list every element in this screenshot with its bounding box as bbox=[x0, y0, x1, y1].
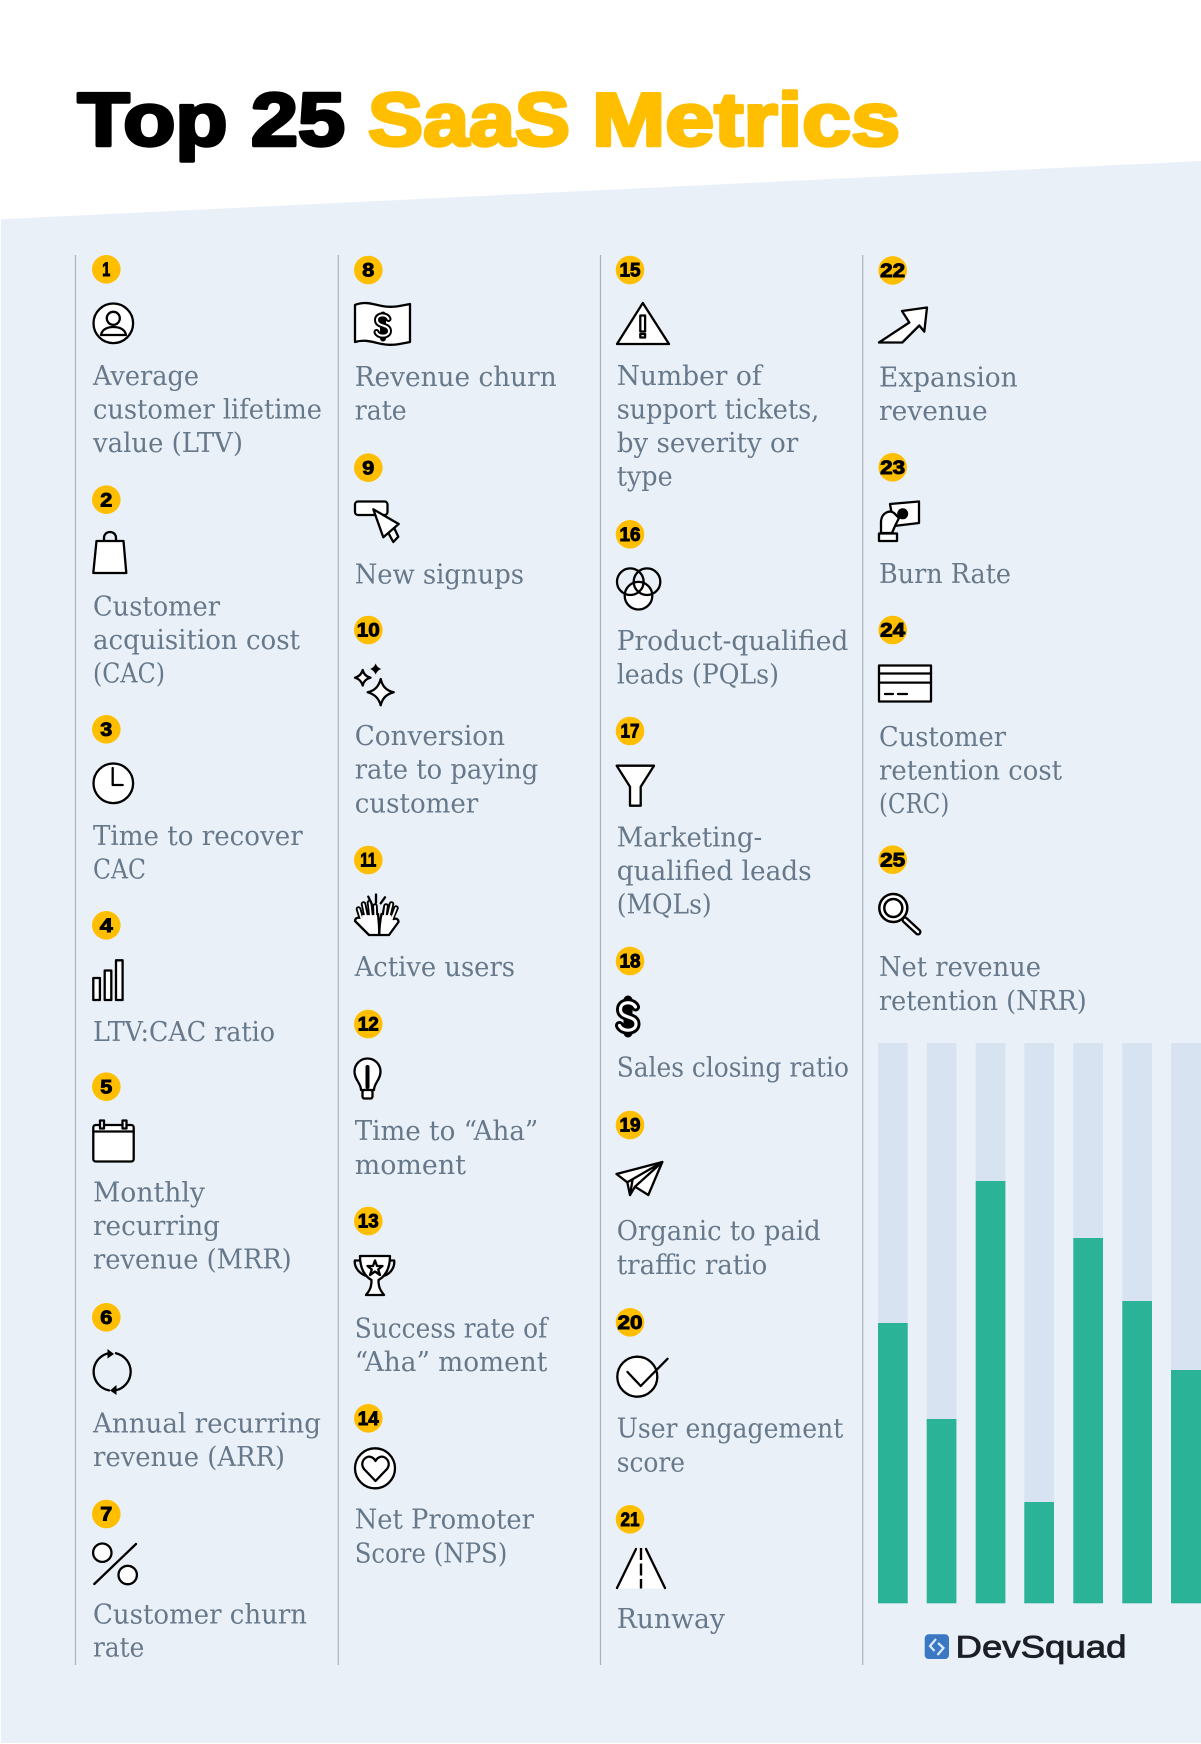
metric 19 bbox=[616, 1111, 821, 1281]
label: Score (NPS) bbox=[355, 1537, 507, 1569]
badge 2: 2 bbox=[100, 490, 112, 511]
icon: magnifier bbox=[879, 894, 918, 932]
label bbox=[879, 362, 1018, 427]
icon: funnel bbox=[617, 766, 654, 806]
logo wordmark: DevSquad bbox=[956, 1629, 1126, 1665]
label: traffic ratio bbox=[617, 1249, 767, 1281]
badge 15: 15 bbox=[620, 261, 641, 282]
badge 5: 5 bbox=[100, 1077, 113, 1098]
label: Product-qualified bbox=[617, 625, 848, 657]
badge 24: 24 bbox=[880, 621, 906, 642]
label: recurring bbox=[93, 1210, 220, 1242]
label: (CAC) bbox=[93, 657, 165, 689]
label: Time to “Aha” bbox=[355, 1115, 538, 1147]
label bbox=[355, 720, 538, 819]
label: revenue (ARR) bbox=[93, 1441, 285, 1473]
badge 8: 8 bbox=[362, 261, 374, 282]
metric 25 bbox=[878, 845, 1087, 1017]
metric 9 bbox=[354, 453, 524, 590]
badge 4: 4 bbox=[100, 916, 113, 937]
badge 2 bbox=[92, 485, 121, 514]
metric 5 bbox=[92, 1072, 292, 1276]
label: Active users bbox=[354, 951, 515, 983]
badge 1 bbox=[92, 255, 121, 284]
label: Net Promoter bbox=[355, 1503, 535, 1535]
label: Revenue churn bbox=[355, 361, 557, 393]
label: Sales closing ratio bbox=[617, 1052, 849, 1084]
DevSquad logo bbox=[925, 1629, 1126, 1665]
label: support tickets, bbox=[617, 394, 819, 426]
label: Customer bbox=[93, 591, 221, 623]
label: Customer churn bbox=[93, 1598, 307, 1630]
label: Expansion bbox=[879, 362, 1018, 394]
label: retention (NRR) bbox=[879, 985, 1087, 1017]
label: rate bbox=[355, 394, 407, 426]
icon: cursor on button bbox=[355, 502, 399, 542]
badge 17 bbox=[616, 717, 644, 745]
icon: light bulb bbox=[354, 1058, 380, 1098]
metric 11 bbox=[354, 846, 515, 983]
metric 4 bbox=[92, 911, 275, 1048]
badge 25 bbox=[878, 845, 907, 874]
metric 10 bbox=[354, 616, 538, 819]
badge 12: 12 bbox=[358, 1015, 379, 1036]
label: (CRC) bbox=[879, 788, 949, 820]
icon: credit card bbox=[879, 666, 931, 702]
label: type bbox=[617, 460, 673, 492]
badge 14: 14 bbox=[358, 1409, 379, 1430]
badge 6: 6 bbox=[100, 1308, 112, 1329]
badge 3 bbox=[92, 715, 121, 744]
label: revenue bbox=[879, 395, 988, 427]
icon: person bbox=[94, 304, 133, 343]
metric 14 bbox=[354, 1404, 535, 1569]
metric 24 bbox=[878, 616, 1062, 820]
label bbox=[355, 1115, 538, 1181]
metric 15 bbox=[616, 256, 819, 492]
title bbox=[78, 77, 900, 161]
label bbox=[355, 1503, 535, 1569]
badge 16: 16 bbox=[620, 525, 640, 546]
metric 13 bbox=[354, 1207, 549, 1378]
badge 21: 21 bbox=[620, 1510, 640, 1531]
label: customer bbox=[355, 787, 479, 819]
badge 8 bbox=[354, 256, 383, 284]
badge 5 bbox=[92, 1072, 121, 1101]
badge 22 bbox=[878, 256, 907, 285]
icon: warning triangle bbox=[617, 303, 669, 344]
icon: dollar sign bbox=[620, 1000, 636, 1033]
icon: high five hands bbox=[355, 894, 398, 935]
label: value (LTV) bbox=[92, 427, 243, 459]
badge 3: 3 bbox=[100, 720, 112, 741]
label: Runway bbox=[617, 1603, 725, 1635]
icon: venn diagram bbox=[617, 568, 660, 610]
title: 25 bbox=[251, 77, 345, 161]
label: Organic to paid bbox=[617, 1215, 821, 1247]
label: “Aha” moment bbox=[355, 1346, 547, 1378]
label bbox=[92, 1408, 321, 1473]
metric 1 bbox=[92, 255, 322, 459]
badge 24 bbox=[878, 616, 907, 644]
badge 14 bbox=[354, 1404, 383, 1433]
icon: shopping bag bbox=[93, 532, 126, 573]
label: rate to paying bbox=[355, 754, 538, 786]
label: moment bbox=[355, 1149, 466, 1181]
badge 11 bbox=[354, 846, 383, 874]
label: LTV:CAC ratio bbox=[93, 1016, 275, 1048]
badge 15 bbox=[616, 256, 644, 284]
icon: heart in circle bbox=[355, 1448, 395, 1488]
metric 3 bbox=[92, 715, 304, 885]
metric 21 bbox=[616, 1505, 725, 1635]
label: Annual recurring bbox=[92, 1408, 321, 1440]
badge 1: 1 bbox=[102, 260, 111, 281]
label: retention cost bbox=[879, 754, 1062, 786]
badge 18: 18 bbox=[620, 952, 640, 973]
label bbox=[355, 1312, 549, 1378]
label: CAC bbox=[93, 853, 146, 885]
icon: bar signal bbox=[93, 960, 123, 1000]
badge 12 bbox=[354, 1010, 383, 1038]
icon: recurring arrows bbox=[94, 1349, 131, 1395]
title: SaaS bbox=[368, 77, 570, 161]
label bbox=[93, 820, 304, 885]
metric 12 bbox=[354, 1010, 538, 1181]
label: Customer bbox=[879, 721, 1007, 753]
metric 17 bbox=[616, 717, 812, 920]
badge 13 bbox=[354, 1207, 383, 1235]
metric 18 bbox=[616, 947, 849, 1084]
icon: paper plane bbox=[616, 1162, 662, 1195]
badge 19: 19 bbox=[620, 1116, 640, 1137]
metric 20 bbox=[616, 1308, 843, 1479]
label: (MQLs) bbox=[617, 888, 712, 920]
label bbox=[93, 591, 300, 689]
label: Time to recover bbox=[93, 820, 304, 852]
metric 7 bbox=[92, 1500, 307, 1664]
label bbox=[92, 360, 322, 459]
badge 7: 7 bbox=[100, 1505, 112, 1526]
badge 13: 13 bbox=[358, 1212, 379, 1233]
label: by severity or bbox=[617, 427, 799, 459]
label: acquisition cost bbox=[93, 624, 300, 656]
metric 22 bbox=[878, 256, 1018, 427]
label bbox=[355, 361, 557, 426]
logo mark bbox=[925, 1634, 949, 1659]
label: Net revenue bbox=[879, 951, 1041, 983]
title: Top bbox=[78, 77, 228, 161]
badge 18 bbox=[616, 947, 644, 975]
label: User engagement bbox=[617, 1412, 843, 1444]
icon: sparkles bbox=[355, 664, 394, 705]
label: Monthly bbox=[93, 1177, 205, 1209]
icon: trophy bbox=[355, 1256, 394, 1295]
label: rate bbox=[93, 1632, 144, 1664]
badge 22: 22 bbox=[880, 261, 905, 282]
icon: calendar bbox=[93, 1120, 134, 1162]
metric 2 bbox=[92, 485, 300, 689]
badge 11: 11 bbox=[360, 851, 377, 872]
badge 4 bbox=[92, 911, 121, 940]
badge 23: 23 bbox=[880, 458, 905, 479]
icon: dollar banknote bbox=[355, 303, 410, 345]
badge 16 bbox=[616, 520, 644, 549]
badge 6 bbox=[92, 1303, 121, 1332]
label bbox=[879, 951, 1087, 1017]
label bbox=[93, 1177, 292, 1276]
label: New signups bbox=[355, 558, 524, 590]
label bbox=[617, 1412, 843, 1479]
metric 23 bbox=[878, 453, 1011, 590]
icon: hand holding cash bbox=[879, 502, 919, 541]
label: Number of bbox=[617, 360, 763, 392]
metric 6 bbox=[92, 1303, 321, 1473]
label: Marketing- bbox=[617, 822, 762, 854]
badge 17: 17 bbox=[620, 722, 640, 743]
label: Conversion bbox=[355, 720, 505, 752]
decorative bar chart bbox=[878, 1043, 1201, 1603]
icon: clock bbox=[94, 764, 133, 803]
label: score bbox=[617, 1447, 685, 1479]
badge 19 bbox=[616, 1111, 644, 1139]
badge 7 bbox=[92, 1500, 121, 1528]
label bbox=[93, 1598, 307, 1664]
label: Success rate of bbox=[355, 1312, 549, 1344]
label: qualified leads bbox=[617, 855, 812, 887]
label bbox=[617, 625, 848, 690]
icon: road bbox=[616, 1548, 666, 1588]
badge 10 bbox=[354, 616, 383, 644]
label: Burn Rate bbox=[879, 558, 1011, 590]
title: Metrics bbox=[592, 77, 900, 161]
label: customer lifetime bbox=[93, 393, 322, 425]
badge 9 bbox=[354, 453, 383, 482]
icon: check in circle bbox=[617, 1357, 668, 1397]
metric 16 bbox=[616, 520, 848, 690]
label bbox=[617, 822, 812, 920]
icon: up-right arrow bbox=[879, 308, 927, 342]
label bbox=[879, 721, 1062, 820]
badge 10: 10 bbox=[357, 621, 380, 642]
label bbox=[617, 1215, 821, 1281]
badge 9: 9 bbox=[362, 458, 374, 479]
label: leads (PQLs) bbox=[617, 658, 779, 690]
badge 25: 25 bbox=[880, 850, 906, 871]
icon: percent bbox=[93, 1544, 137, 1584]
badge 20 bbox=[616, 1308, 644, 1337]
label bbox=[617, 360, 819, 492]
badge 20: 20 bbox=[618, 1313, 642, 1334]
label: revenue (MRR) bbox=[93, 1244, 292, 1276]
label: Average bbox=[92, 360, 199, 392]
metric 8 bbox=[354, 256, 557, 426]
